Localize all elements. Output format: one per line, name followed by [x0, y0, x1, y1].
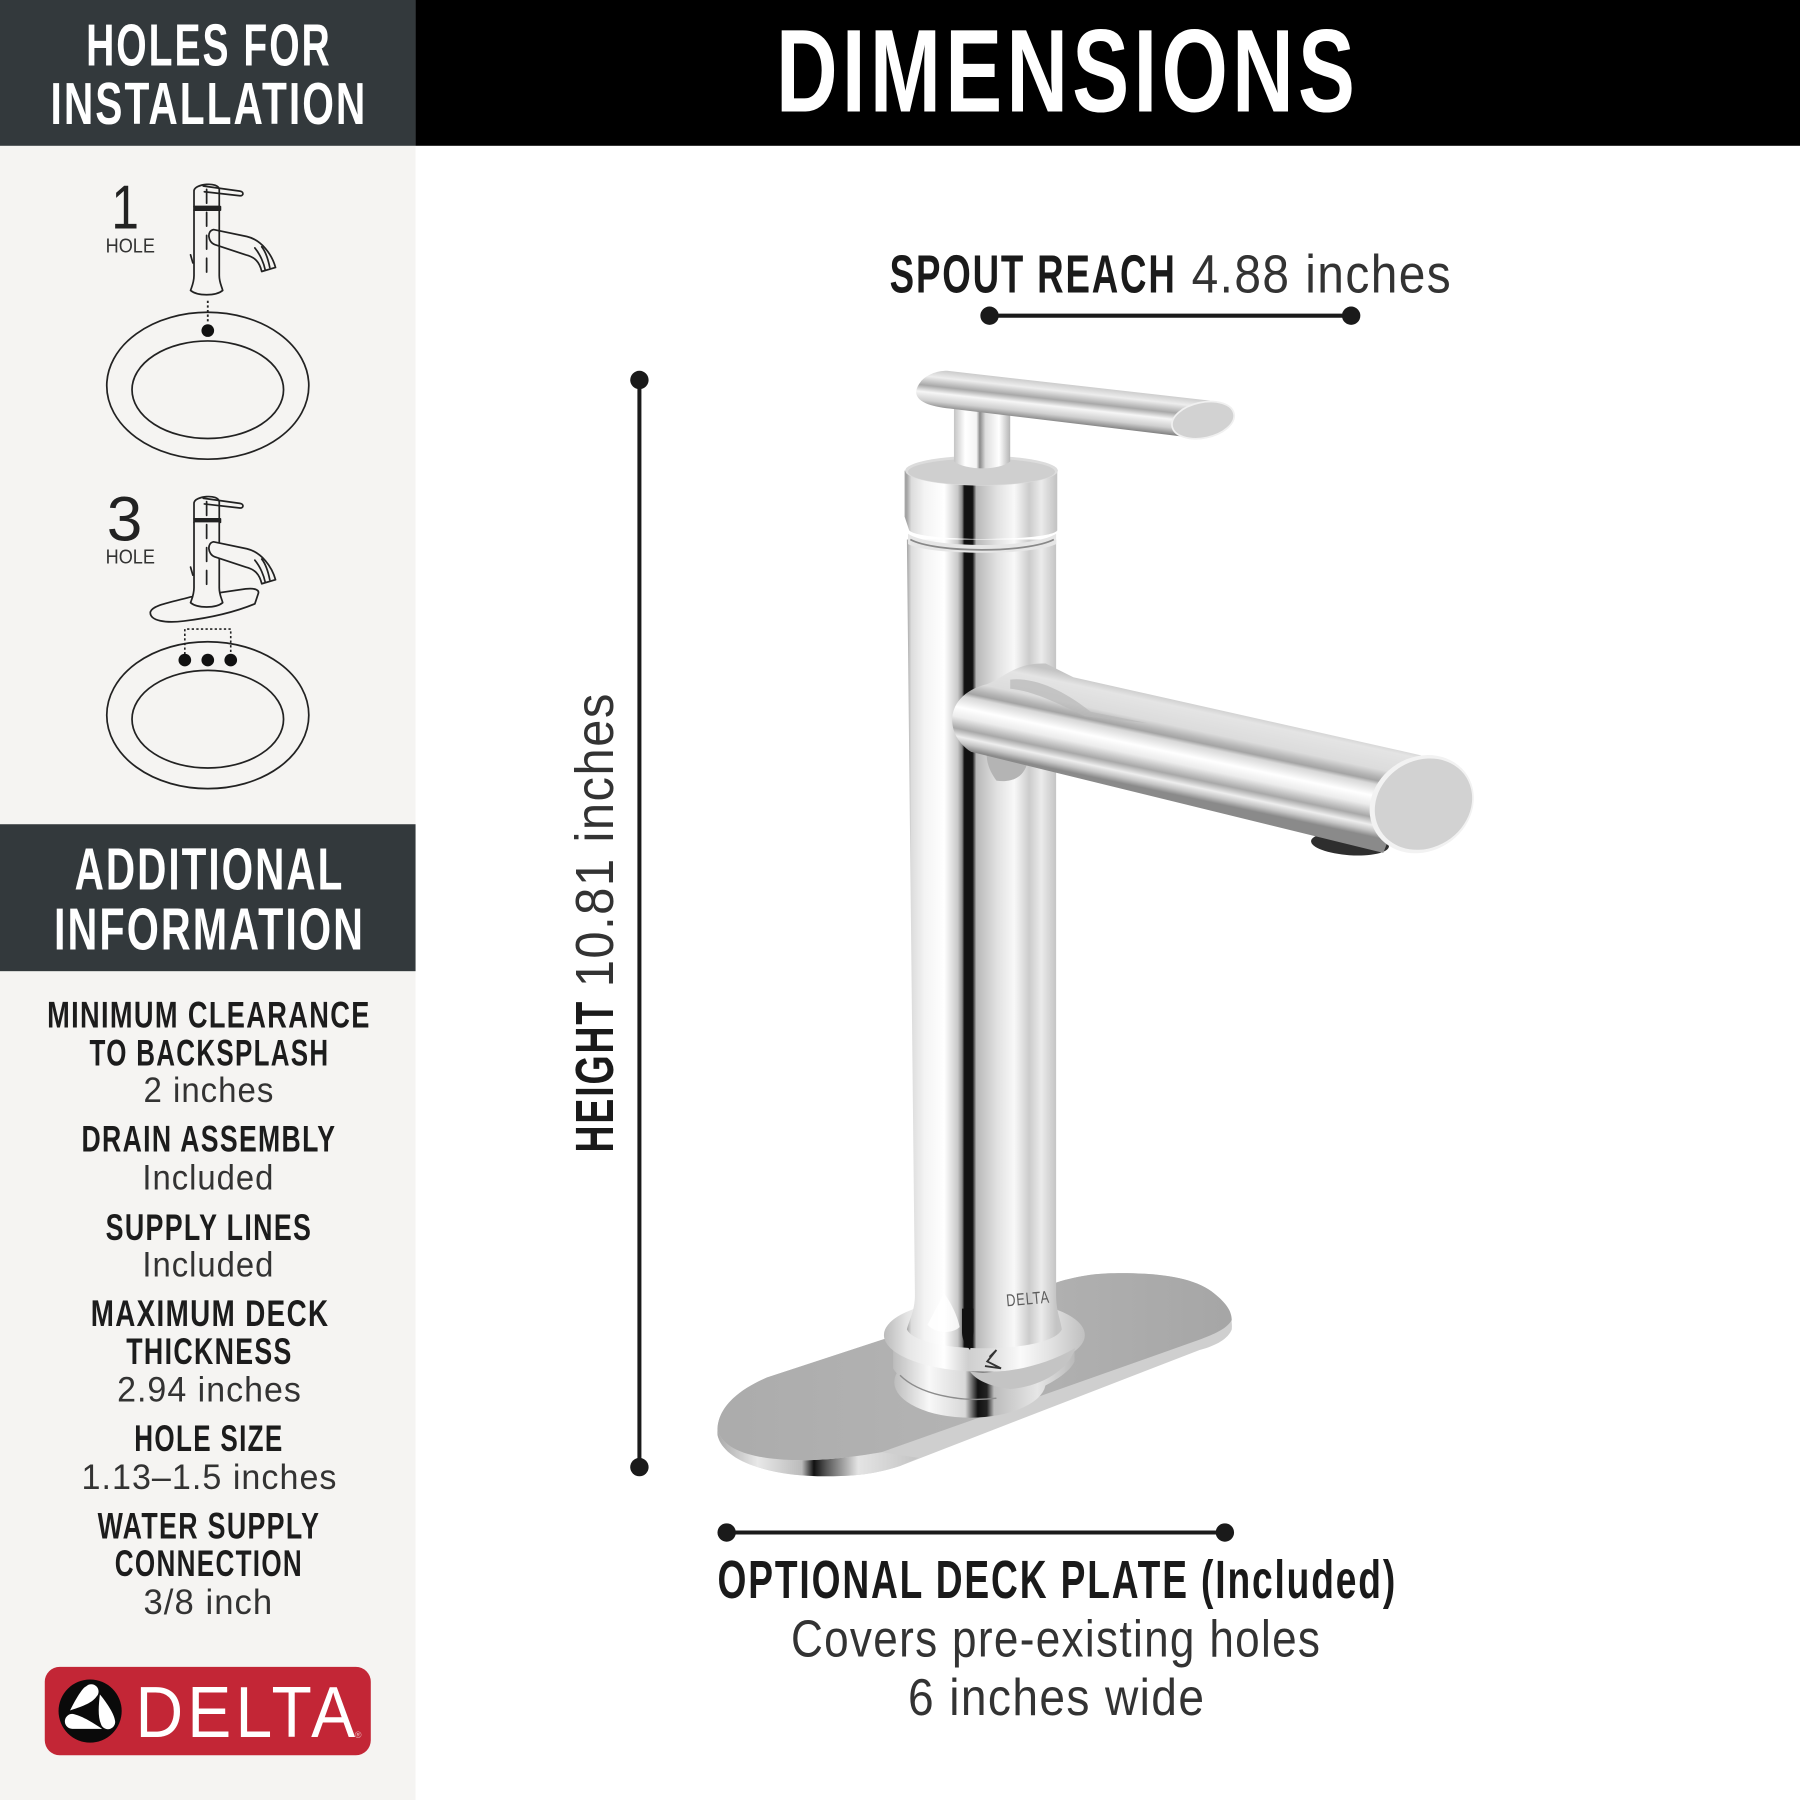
icon: faucet line drawing — [191, 184, 276, 295]
text block: minimum clearance — [47, 994, 371, 1110]
label: 3 hole: HOLE — [106, 546, 155, 569]
base flange — [884, 1298, 1085, 1389]
text block: drain assembly: DRAIN ASSEMBLY — [82, 1118, 336, 1159]
panel: one hole installation — [106, 173, 309, 459]
logo: delta — [45, 1667, 371, 1755]
heading: holes for installation — [0, 0, 416, 146]
heading: additional information — [0, 824, 416, 971]
dimension: height — [565, 371, 649, 1476]
text block: minimum clearance: TO BACKSPLASH — [90, 1032, 329, 1073]
heading: additional information: INFORMATION — [54, 895, 365, 962]
logo: delta: ® — [355, 1730, 362, 1740]
heading: dimensions: DIMENSIONS — [776, 5, 1359, 137]
text block: maximum deck thickness: 2.94 inches — [117, 1370, 302, 1410]
text block: supply lines: Included — [142, 1245, 274, 1285]
dimension: optional deck plate: OPTIONAL DECK PLATE (Included) — [717, 1550, 1397, 1610]
dimension: optional deck plate: 6 inches wide — [908, 1668, 1205, 1726]
handle cap — [905, 456, 1058, 553]
text block: water supply connection: 3/8 inch — [143, 1582, 273, 1622]
icon: sink with three holes — [107, 629, 309, 789]
text block: supply lines — [106, 1207, 312, 1285]
dimension: height: HEIGHT — [565, 1000, 625, 1153]
text block: supply lines: SUPPLY LINES — [106, 1207, 312, 1248]
heading: additional information: ADDITIONAL — [75, 836, 344, 903]
dimension: optional deck plate — [717, 1523, 1397, 1726]
brand mark on body: DELTA — [1005, 1287, 1051, 1310]
text block: water supply connection: WATER SUPPLY — [98, 1505, 320, 1546]
icon: sink with one hole — [107, 301, 309, 459]
heading: holes for installation: HOLES FOR — [86, 11, 332, 78]
label: 1 hole: HOLE — [106, 235, 155, 258]
dimension: spout reach: SPOUT REACH — [890, 245, 1177, 305]
text block: maximum deck thickness — [91, 1293, 329, 1410]
text block: hole size: HOLE SIZE — [134, 1418, 284, 1459]
text block: drain assembly: Included — [142, 1157, 274, 1197]
handle stem — [954, 409, 1010, 468]
label: 1 hole: 1 — [111, 173, 139, 242]
heading: dimensions — [416, 0, 1800, 146]
label: 3 hole — [106, 485, 155, 569]
text block: water supply connection — [98, 1505, 320, 1622]
logo: delta: DELTA — [135, 1673, 359, 1753]
faucet body — [907, 540, 1062, 1350]
aerator — [1310, 830, 1390, 858]
text block: minimum clearance: 2 inches — [143, 1070, 274, 1110]
dimension: spout reach — [890, 245, 1452, 325]
deck plate — [717, 1273, 1232, 1476]
dimension: spout reach: 4.88 inches — [1192, 245, 1452, 305]
dimension: height: 10.81 inches — [565, 692, 625, 987]
spout — [952, 663, 1492, 873]
text block: hole size — [82, 1418, 338, 1497]
icon: faucet with deck plate line drawing — [150, 497, 276, 622]
panel: three hole installation — [106, 485, 309, 789]
text block: minimum clearance: MINIMUM CLEARANCE — [47, 994, 371, 1035]
text block: water supply connection: CONNECTION — [115, 1543, 303, 1584]
handle lever — [916, 371, 1238, 444]
text block: drain assembly — [82, 1118, 336, 1197]
text block: maximum deck thickness: MAXIMUM DECK — [91, 1293, 329, 1334]
base collar — [893, 1343, 1074, 1418]
faucet product illustration — [717, 371, 1492, 1476]
label: 1 hole — [106, 173, 155, 258]
dimension: optional deck plate: Covers pre-existing holes — [791, 1610, 1321, 1668]
heading: holes for installation: INSTALLATION — [51, 70, 367, 137]
text block: hole size: 1.13–1.5 inches — [82, 1457, 338, 1497]
panel: sidebar background — [0, 0, 416, 1800]
text block: maximum deck thickness: THICKNESS — [126, 1331, 293, 1372]
label: 3 hole: 3 — [107, 485, 142, 555]
